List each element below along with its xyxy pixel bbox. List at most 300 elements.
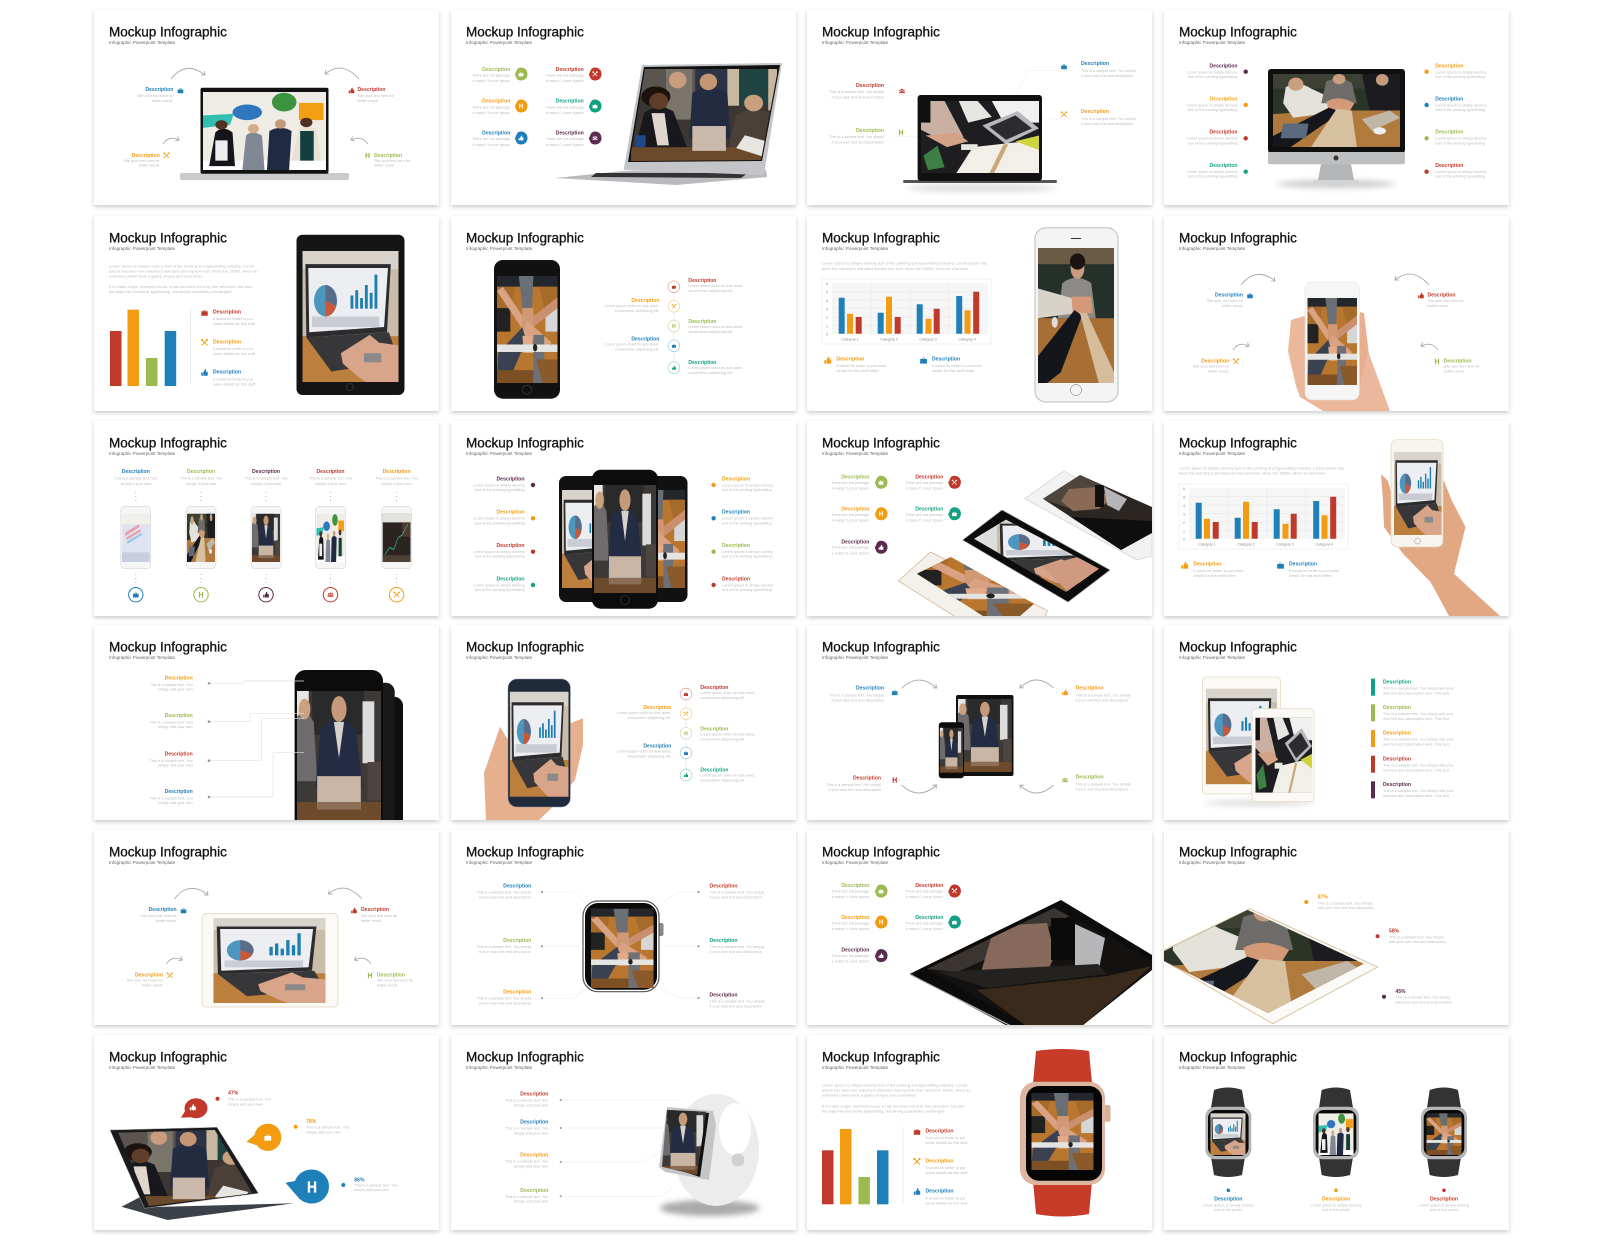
callout: green: This is a sample text. You: [505, 1195, 548, 1199]
column: green: simply d your own: [186, 482, 216, 486]
callout: blue: Description: [520, 1120, 548, 1126]
chart: 5: [826, 290, 828, 294]
legend: red: some details for this stuff.: [213, 322, 256, 326]
callout: orange: Lorem ipsum dolor sit duis amet,: [617, 711, 671, 715]
item: red: Description: [1383, 756, 1411, 762]
callout: teal: [688, 360, 743, 375]
column: orange: Description: [383, 469, 411, 475]
device: red band watch: [1020, 1049, 1110, 1216]
callout: teal blob: Description: [915, 507, 943, 513]
watch 2: text of the printin: [1322, 1208, 1350, 1212]
callout: orange: better result.: [142, 983, 163, 987]
callout: blue: Description: [856, 686, 884, 692]
callout: purple: Lorem ipsum is simply dummy: [473, 483, 525, 487]
callout: purple blob: Description: [841, 539, 869, 545]
item: orange: own text and description here. This text: [1383, 743, 1450, 747]
bubble: blue: [286, 1170, 329, 1204]
callout: red: consectetur adipiscing elit.: [688, 289, 733, 293]
callout: red: better result.: [358, 99, 379, 103]
callout: orange blob: Description: [841, 915, 869, 921]
arrow: [1020, 680, 1054, 688]
callout: orange: if your own text and description: [1076, 699, 1128, 703]
callout: orange blob: [831, 915, 888, 931]
title: Infographic Powerpoint Template: [109, 246, 176, 251]
legend: orange: [1181, 562, 1243, 578]
callout: red: Description: [496, 543, 524, 549]
callout: blue: This is a sample text. You: [505, 1127, 548, 1131]
callout: green blob: [472, 67, 528, 83]
callout: blue: [150, 789, 210, 805]
callout: teal blob: a many f Lorem Ipsum: [546, 111, 584, 115]
callout: teal: [700, 767, 755, 782]
callout: teal blob: There are ma passage: [905, 513, 943, 517]
callout: red: Lorem ipsum dolor sit duis amet,: [700, 691, 755, 695]
arrow: [354, 958, 371, 964]
column: red: [309, 469, 352, 602]
title: Infographic Powerpoint Template: [466, 1065, 533, 1070]
legend: orange: some details for this stuff.: [926, 1171, 968, 1175]
title: Infographic Powerpoint Template: [822, 1065, 889, 1070]
callout: orange blob: Description: [482, 99, 510, 105]
callout: orange: [123, 152, 170, 168]
callout: red blob: a many f Lorem Ipsum: [906, 487, 943, 491]
callout: red blob: [905, 475, 961, 491]
callout: purple blob: a many f Lorem Ipsum: [546, 143, 584, 147]
item: teal: This is a sample text. You simply add your: [1383, 686, 1454, 690]
callout: 78 percent: simply add your own: [306, 1130, 341, 1134]
callout: blue: better result.: [1222, 304, 1243, 308]
legend: red: Description: [926, 1129, 954, 1135]
callout: teal: Description: [700, 767, 728, 773]
callout: green blob: There are ma passage: [831, 481, 869, 485]
callout: teal blob: a many f Lorem Ipsum: [906, 519, 943, 523]
device: hand with phone: [1381, 440, 1500, 616]
callout: teal blob: [905, 915, 961, 931]
callout: green: This is a sample text. You simply: [476, 945, 531, 949]
callout: orange: This is a sample text. You simply: [1081, 117, 1136, 121]
callout: orange: Description: [503, 990, 531, 996]
callout: orange right: text of the printing typesetting: [1435, 75, 1485, 79]
callout: 86 percent: simply add your own: [354, 1188, 389, 1192]
callout: orange: [473, 510, 535, 525]
callout: green: Description: [165, 713, 193, 719]
title: Infographic Powerpoint Template: [466, 246, 533, 251]
legend: orange: details for this stuff better.: [836, 369, 880, 373]
callout: orange: Description: [496, 510, 524, 516]
callout: 45 percent: This is a sample text. You simply: [1395, 996, 1450, 1000]
callout: orange: Description: [1081, 109, 1109, 115]
callout: orange: Lorem ipsum dolor sit duis amet,: [605, 304, 659, 308]
callout: green: Description: [377, 972, 405, 978]
callout: red: This is a sample text. You simply: [829, 90, 884, 94]
callout: red right: Description: [722, 576, 750, 582]
callout: green: Description: [1444, 358, 1472, 364]
callout: purple blob: [831, 539, 888, 555]
callout: red: [698, 883, 764, 899]
legend: blue: some details for this stuff.: [926, 1201, 968, 1205]
title: Mockup Infographic: [466, 25, 584, 40]
title: Mockup Infographic: [1179, 845, 1297, 860]
callout: purple blob: There are ma passage: [545, 137, 584, 141]
panel 2: open laptop with blobs: [451, 10, 796, 205]
callout: blue: Lorem ipsum dolor sit duis amet,: [617, 750, 671, 754]
callout: red: Site your text here for: [1428, 299, 1465, 303]
callout: red: [505, 1092, 562, 1107]
chart: 4: [826, 299, 828, 303]
arrow: [171, 68, 205, 79]
panel 13: stacked phones with connector lines: [94, 625, 439, 837]
callout: purple blob: a many f Lorem Ipsum: [832, 960, 869, 964]
callout: red: better result.: [1428, 304, 1449, 308]
arrow: [902, 785, 936, 793]
callout: teal blob: Description: [556, 99, 584, 105]
column: blue: This is a sample text. You: [114, 477, 157, 481]
callout: blue: consectetur adipiscing elit.: [627, 755, 671, 759]
title: Mockup Infographic: [822, 640, 940, 655]
body text: the leap into electronic typesetting, remaining essentially unchanged.: [822, 1108, 946, 1113]
callout: green: consectetur adipiscing elit.: [688, 330, 733, 334]
callout: blue right: [1424, 96, 1486, 112]
callout: red: [826, 775, 897, 792]
callout: orange right: [711, 476, 773, 492]
legend: orange: [824, 357, 886, 373]
body text: Lorem Ipsum is simply dummy text of the printing and typesetting industry. Lorem: [822, 1083, 968, 1088]
title: Mockup Infographic: [109, 25, 227, 40]
callout: blue: Description: [503, 883, 531, 889]
callout: orange: [127, 972, 173, 987]
device: tablet and phone: [939, 695, 1014, 778]
column: red: Description: [316, 469, 345, 475]
callout: orange: [1193, 358, 1239, 373]
icon timeline: [680, 688, 692, 781]
callout: 58 percent: This is a sample text. You simply: [1389, 935, 1444, 939]
callout: orange: Description: [165, 676, 193, 682]
title: Infographic Powerpoint Template: [1179, 40, 1246, 45]
legend: red: It would be better to put: [213, 317, 254, 321]
panel 21: tablet with keyboard and speech bubbles: [94, 1035, 439, 1230]
chart: 0: [1183, 538, 1185, 542]
callout: 78 percent: This is a sample text. You: [306, 1125, 349, 1129]
callout: teal: Lorem ipsum is simply dummy: [1186, 170, 1238, 174]
device: middle phone: [963, 510, 1110, 602]
callout: purple: if your own text and description: [710, 1005, 762, 1009]
callout: red right: Lorem ipsum is simply dummy: [722, 583, 773, 587]
callout: red blob: a many f Lorem Ipsum: [546, 79, 584, 83]
callout: green blob: Description: [841, 883, 869, 889]
callout: teal: Description: [496, 576, 524, 582]
legend: orange: It would be better to put: [926, 1166, 966, 1170]
callout: orange: [476, 990, 543, 1006]
chart: Category 3: [1276, 543, 1294, 547]
chart: Category 4: [1315, 543, 1333, 547]
legend: orange: Description: [926, 1159, 954, 1165]
title: Mockup Infographic: [822, 231, 940, 246]
callout: green: This is a sample text. You simply: [829, 135, 884, 139]
callout: red: Description: [358, 87, 386, 93]
title: Infographic Powerpoint Template: [109, 40, 176, 45]
callout: red: Description: [1428, 293, 1456, 299]
callout: orange: better result.: [1208, 369, 1229, 373]
panel 10: three phones: [451, 421, 796, 616]
panel 7: white phone with chart: [807, 216, 1152, 411]
chart: [1179, 484, 1348, 549]
callout: 47 percent: simply add your own: [228, 1102, 263, 1106]
chart: Category 1: [1198, 543, 1216, 547]
callout: blue: Description: [149, 907, 177, 913]
callout: green blob: There are ma passage: [831, 889, 869, 893]
callout: red: This is a sample text. You: [150, 759, 193, 763]
title: Infographic Powerpoint Template: [1179, 1065, 1246, 1070]
callout: orange: text of the printing typesetting: [1188, 108, 1238, 112]
legend: orange: details for this stuff better.: [1193, 574, 1237, 578]
title: Infographic Powerpoint Template: [109, 655, 176, 660]
title: Mockup Infographic: [822, 436, 940, 451]
title: Infographic Powerpoint Template: [466, 40, 533, 45]
callout: purple: text of the printing typesetting: [475, 488, 524, 492]
title: Mockup Infographic: [822, 25, 940, 40]
callout: purple blob: [831, 948, 888, 964]
callout: red: [688, 278, 743, 293]
body text: [822, 1083, 971, 1113]
callout: blue: [505, 1120, 562, 1135]
callout: green: better result.: [374, 164, 395, 168]
bubble: orange: [246, 1124, 281, 1151]
arrow: [1241, 274, 1275, 285]
chart: Category 1: [841, 338, 859, 342]
callout: 45 percent: add your own text and description: [1395, 1000, 1452, 1004]
title: Mockup Infographic: [1179, 436, 1297, 451]
callout: blue: Description: [631, 337, 659, 343]
chart: 3: [1183, 512, 1185, 516]
body text: the leap into electronic typesetting, remaining essentially unchanged.: [109, 289, 233, 294]
panel 16: two tablets with colour bars: [1164, 625, 1509, 820]
callout: blue: Description: [165, 789, 193, 795]
chart: Category 2: [880, 338, 898, 342]
callout: orange: Description: [631, 298, 659, 304]
callout: green right: [711, 543, 773, 559]
callout: blue: simply add your own: [158, 801, 193, 805]
callout: orange: [505, 1153, 562, 1168]
callout: teal: text of the printing typesetting: [1188, 175, 1238, 179]
callout: red blob: There are ma passage: [905, 481, 943, 485]
callout: green right: Description: [722, 543, 750, 549]
callout: blue: This is a sample text. You simply: [829, 693, 884, 697]
title: Infographic Powerpoint Template: [466, 655, 533, 660]
callout: green blob: a many f Lorem Ipsum: [472, 79, 510, 83]
panel 3: dark laptop with connectors: [807, 10, 1152, 205]
column: blue: simply d your own: [121, 482, 151, 486]
callout: teal blob: [545, 99, 602, 115]
callout: green: if your own text and description: [832, 141, 884, 145]
callout: teal: consectetur adipiscing elit.: [688, 371, 733, 375]
callout: orange blob: a many f Lorem Ipsum: [832, 927, 869, 931]
title: Infographic Powerpoint Template: [1179, 246, 1246, 251]
callout: red right: Description: [1435, 163, 1463, 169]
callout: green: [505, 1188, 562, 1204]
legend: orange: Description: [1193, 562, 1221, 568]
item: red: This is a sample text. You simply add your: [1383, 763, 1454, 767]
callout: teal: Description: [710, 938, 738, 944]
callout: orange: Description: [1076, 686, 1104, 692]
callout: 86 percent: [341, 1177, 397, 1192]
item: purple: [1371, 781, 1454, 798]
callout: blue: This is a sample text. You simply: [1081, 69, 1136, 73]
callout: teal blob: Description: [915, 915, 943, 921]
title: Infographic Powerpoint Template: [1179, 655, 1246, 660]
device: tablet: [296, 235, 404, 395]
callout: red blob: a many f Lorem Ipsum: [906, 895, 943, 899]
callout: purple blob: [545, 131, 602, 147]
callout: red: Description: [710, 883, 738, 889]
callout: green: Description: [503, 938, 531, 944]
item: red: own text and description here. This text: [1383, 768, 1450, 772]
callout: purple blob: Description: [556, 131, 584, 137]
title: Mockup Infographic: [1179, 231, 1297, 246]
panel 11: isometric phones: [807, 421, 1157, 621]
callout: purple: Lorem ipsum is simply dummy: [1186, 70, 1238, 74]
callout: teal: [698, 938, 764, 954]
callout: blue: [617, 744, 671, 759]
watch 1: [1203, 1088, 1254, 1212]
item: green: This is a sample text. You simply add your: [1383, 712, 1454, 716]
callout: red blob: There are ma passage: [905, 889, 943, 893]
column: purple: This is a sample text. You: [244, 477, 288, 481]
legend: blue: [1277, 562, 1339, 578]
title: Infographic Powerpoint Template: [1179, 860, 1246, 865]
callout: orange: better result.: [139, 164, 160, 168]
callout: red: consectetur adipiscing elit.: [700, 696, 745, 700]
callout: teal blob: There are ma passage: [905, 921, 943, 925]
title: Infographic Powerpoint Template: [822, 40, 889, 45]
callout: orange blob: There are ma passage: [472, 105, 510, 109]
chart: [822, 279, 991, 344]
callout: red: text of the printing typesetting: [1188, 141, 1238, 145]
callout: teal blob: a many f Lorem Ipsum: [906, 927, 943, 931]
chart: 5: [1183, 496, 1185, 500]
device: bottom phone: [898, 549, 1048, 621]
callout: green: Lorem ipsum dolor sit duis amet,: [700, 732, 755, 736]
title: Infographic Powerpoint Template: [109, 451, 176, 456]
legend: red: It would be better to put: [926, 1136, 966, 1140]
chart: 3: [826, 308, 828, 312]
title: Mockup Infographic: [1179, 25, 1297, 40]
callout: blue right: text of the printing typesetting: [722, 521, 772, 525]
callout: red: Description: [856, 83, 884, 89]
device: phone: [494, 260, 560, 399]
callout: 86 percent: 86%: [354, 1177, 365, 1183]
callout: green blob: a many f Lorem Ipsum: [832, 487, 869, 491]
legend: orange: It would be better to put some: [1193, 569, 1243, 573]
column: green: Description: [187, 469, 215, 475]
chart: 2: [1183, 521, 1185, 525]
watch 3: [1418, 1088, 1470, 1212]
callout: blue: This is a sample text. You simply: [476, 890, 531, 894]
device: laptop: [903, 95, 1057, 192]
panel 12: hand holding gold phone with chart: [1164, 421, 1509, 616]
callout: orange: Description: [1201, 358, 1229, 364]
callout: orange: simply add your own: [514, 1164, 548, 1168]
callout: red: if your own text and description: [832, 96, 884, 100]
column: blue: Description: [122, 469, 150, 475]
arrow: [351, 138, 368, 144]
callout: green: [1062, 775, 1131, 791]
callout: red: Description: [361, 907, 389, 913]
device: laptop: [555, 63, 782, 185]
legend: orange: [913, 1158, 968, 1175]
callout: orange: consectetur adipiscing elit.: [615, 309, 659, 313]
arrow: [328, 888, 362, 899]
callout: orange blob: a many f Lorem Ipsum: [832, 519, 869, 523]
body text: Ipsum has been the industry's standard dummy text ever since the 1500s, when an: [822, 1088, 971, 1093]
callout: 87 percent: This is a sample text. You simply: [1318, 901, 1373, 905]
legend: red: Description: [213, 310, 241, 316]
title: Mockup Infographic: [466, 436, 584, 451]
callout: 87 percent: [1304, 894, 1374, 910]
callout: purple: [473, 476, 535, 492]
arrow: [325, 68, 359, 79]
column: red: This is a sample text. You: [309, 477, 352, 481]
legend: orange: Description: [836, 357, 864, 363]
legend: blue: It would be better to put: [213, 377, 254, 381]
callout: blue: [140, 907, 186, 923]
callout: blue right: Description: [1435, 96, 1463, 102]
callout: blue: Lorem ipsum dolor sit duis amet,: [605, 343, 659, 347]
callout: purple: text of the printing typesetting: [1188, 75, 1238, 79]
callout: orange: [1062, 686, 1131, 703]
callout: 45 percent: [1382, 989, 1452, 1004]
bubble: red: [181, 1098, 208, 1118]
callout: orange: Lorem ipsum is simply dummy: [1186, 103, 1238, 107]
column: orange: simply d your own: [381, 482, 412, 486]
callout: red: [1186, 130, 1248, 145]
item: teal: Description: [1383, 679, 1411, 685]
callout: green: This is a sample text. You simply: [1076, 782, 1131, 786]
body text: unknown printer took a galley of type and scrambled: [109, 274, 203, 279]
callout: red: Lorem ipsum is simply dummy: [1186, 137, 1238, 141]
callout: green: [688, 319, 743, 334]
watch 3: Description: [1430, 1196, 1458, 1202]
column: orange: This is a sample text. You: [375, 477, 418, 481]
device: laptop: [180, 88, 349, 180]
bar chart: [110, 310, 176, 386]
legend: red: [914, 1129, 968, 1145]
item: purple: Description: [1383, 782, 1411, 788]
callout: teal: Lorem ipsum dolor sit duis amet,: [688, 366, 743, 370]
callout: orange: Description: [1209, 96, 1238, 102]
callout: green: Site your text here for: [1444, 364, 1481, 368]
callout: red: [700, 685, 755, 700]
arrow: [163, 138, 179, 144]
title: Mockup Infographic: [1179, 1050, 1297, 1065]
title: Infographic Powerpoint Template: [822, 246, 889, 251]
callout: red right: Lorem ipsum is simply dummy: [1435, 170, 1486, 174]
column: blue: [114, 469, 157, 602]
device: tablet: [202, 914, 338, 1007]
callout: 87 percent: add your own text and description: [1318, 906, 1374, 910]
callout: blue right: Lorem ipsum is simply dummy: [722, 517, 773, 521]
callout: green: Lorem ipsum dolor sit duis amet,: [688, 325, 743, 329]
device: watch: [583, 901, 664, 992]
callout: red: better result.: [361, 919, 382, 923]
body text: It is make a type specimen book. It has survived not only five centuries, but also: [822, 1103, 966, 1108]
callout: blue: Description: [1081, 61, 1109, 67]
panel 6: phone timeline: [451, 216, 796, 411]
callout: red: text of the printing typesetting: [475, 555, 524, 559]
title: Infographic Powerpoint Template: [466, 860, 533, 865]
body text: Lorem Ipsum is simply dummy text of the printing and typesetting industry. Lorem Ipsum has: [822, 261, 987, 266]
callout: red: [349, 87, 395, 103]
callout: red: [1418, 293, 1465, 308]
